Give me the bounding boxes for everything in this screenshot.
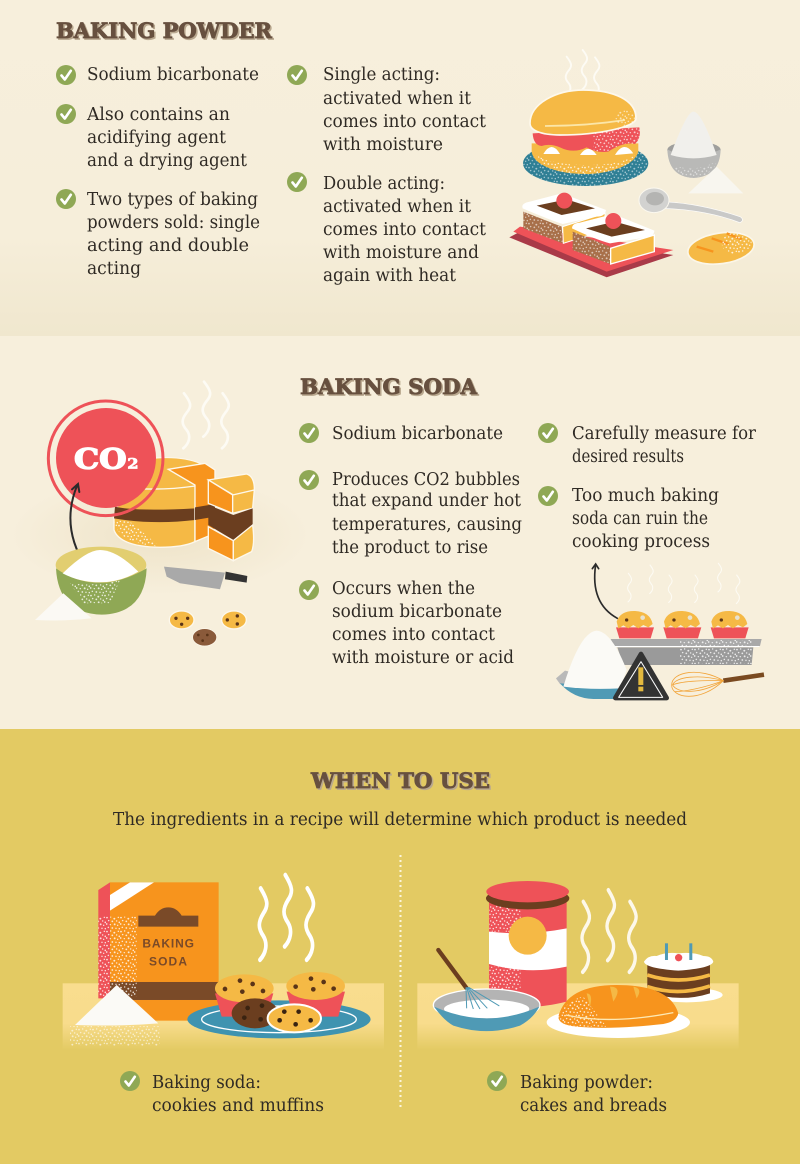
baking soda box: BAKING xyxy=(142,937,194,951)
check icons column two xyxy=(538,423,558,506)
heading: when to use: WHEN TO USE xyxy=(311,770,492,794)
muffins xyxy=(215,972,345,1017)
panel: when to use xyxy=(0,729,800,1164)
text: powder facts column two: activated when it xyxy=(323,89,471,109)
illustration: muffins, pan, warning, whisk xyxy=(556,563,764,699)
text: powder facts column one: powders sold: single xyxy=(87,213,260,233)
cake slice xyxy=(208,474,254,561)
heading: baking soda: BAKING SODA xyxy=(300,374,478,399)
check icons column one xyxy=(299,423,319,600)
text: soda facts column one: temperatures, causing xyxy=(332,515,522,535)
green bowl with powder xyxy=(35,547,147,621)
steam xyxy=(582,890,636,972)
check icon: soda use xyxy=(120,1071,140,1091)
text: soda facts column two xyxy=(572,424,757,552)
text: powder facts column one: acting and double xyxy=(87,236,249,256)
text: baking powder use: cakes and breads xyxy=(520,1096,667,1116)
CO2 badge: 2 xyxy=(127,457,139,473)
text: soda facts column one: sodium bicarbonate xyxy=(332,602,502,622)
heading: when to use: WHEN TO USE xyxy=(310,768,490,793)
text: soda facts column one: with moisture or acid xyxy=(332,648,514,668)
baking powder can xyxy=(486,881,569,1007)
heading: baking powder: BAKING POWDER xyxy=(58,20,274,44)
round cake with cut xyxy=(114,458,215,547)
check icons column one xyxy=(56,65,76,209)
CO2 badge xyxy=(48,401,163,516)
illustration: baking soda box, cookies, muffins xyxy=(63,875,384,1050)
text: powder facts column two: comes into contact xyxy=(323,220,486,240)
knife xyxy=(164,567,247,589)
text: powder facts column one: Also contains an xyxy=(86,105,230,125)
subtitle: The ingredients in a recipe will determine which product is needed xyxy=(113,810,687,830)
plate xyxy=(187,1000,371,1038)
spoon xyxy=(639,188,742,223)
text: soda facts column two: cooking process xyxy=(572,532,710,552)
panel: baking powder xyxy=(0,0,800,336)
steam xyxy=(259,875,313,960)
text: powder facts column one: and a drying agent xyxy=(87,151,247,171)
bread xyxy=(686,228,756,268)
text: baking soda use: cookies and muffins xyxy=(152,1096,324,1116)
table xyxy=(63,983,384,1050)
birthday cake xyxy=(644,943,723,1002)
steam xyxy=(628,563,740,604)
text: baking soda use: Baking soda: xyxy=(152,1073,261,1093)
check icon: powder use xyxy=(487,1071,507,1091)
text: soda facts column one: the product to rise xyxy=(332,538,488,558)
text: powder facts column two: activated when it xyxy=(323,197,471,217)
text: soda facts column one: Sodium bicarbonate xyxy=(332,424,503,444)
divider xyxy=(400,855,402,1110)
text: soda facts column one: Produces CO2 bubbles xyxy=(332,470,520,490)
arrow: bowl to CO2 xyxy=(70,484,86,567)
illustration: CO2, cake, bowl, knife, cookies xyxy=(35,382,254,646)
text: powder facts column two: Single acting: xyxy=(323,65,440,85)
text: powder facts column one: Two types of baking xyxy=(87,190,258,210)
illustration: cakes, powder bowl, spoon, bread xyxy=(509,50,756,277)
baking soda box xyxy=(98,882,219,1021)
text: powder facts column two: comes into contact xyxy=(323,112,486,132)
check icons column two xyxy=(287,65,307,192)
text: soda facts column one: that expand under hot xyxy=(332,491,521,511)
text: baking powder use: Baking powder: xyxy=(520,1073,653,1093)
red mat xyxy=(509,227,673,277)
soft shadow behind cake xyxy=(10,475,310,595)
warning sign xyxy=(615,654,667,698)
text: powder facts column two xyxy=(323,65,486,286)
illustration: baking powder can, bread, cake xyxy=(417,881,739,1050)
steam xyxy=(183,382,229,448)
text: baking powder use xyxy=(520,1073,667,1116)
whisk xyxy=(672,672,764,696)
arrow upward xyxy=(592,564,617,618)
mixing bowl and whisk xyxy=(433,950,540,1031)
powder pile xyxy=(70,985,160,1046)
muffins xyxy=(616,611,749,638)
powder in teal bowl xyxy=(556,631,627,699)
cookies xyxy=(169,611,246,646)
heading: baking powder: BAKING POWDER xyxy=(56,18,273,43)
powder bowl xyxy=(667,112,743,193)
text: soda facts column one: Occurs when the xyxy=(332,579,475,599)
cookies xyxy=(232,998,321,1032)
cake slices xyxy=(522,193,654,264)
layered cake on plate xyxy=(523,90,648,186)
text: powder facts column one: acidifying agent xyxy=(87,128,226,148)
baking soda box: SODA xyxy=(149,954,187,968)
text: powder facts column two: with moisture and xyxy=(323,243,479,263)
CO2 badge: CO xyxy=(74,442,127,475)
text: soda facts column two: Too much baking xyxy=(572,486,719,506)
text: soda facts column one: comes into contact xyxy=(332,625,495,645)
text: powder facts column two: Double acting: xyxy=(323,174,445,194)
table xyxy=(417,983,739,1050)
baking pan xyxy=(611,639,762,665)
bread on plate xyxy=(547,985,690,1038)
text: baking soda use xyxy=(152,1073,324,1116)
text: powder facts column one xyxy=(86,65,260,279)
steam xyxy=(566,50,599,97)
text: powder facts column one: Sodium bicarbonate xyxy=(87,65,259,85)
text: soda facts column two: desired results xyxy=(572,447,684,467)
text: soda facts column two: Carefully measure for xyxy=(572,424,757,444)
panel: baking soda xyxy=(0,336,800,730)
text: powder facts column two: again with heat xyxy=(323,266,456,286)
text: soda facts column one xyxy=(332,424,522,668)
heading: baking soda: BAKING SODA xyxy=(302,376,479,400)
text: soda facts column two: soda can ruin the xyxy=(572,509,708,529)
text: powder facts column two: with moisture xyxy=(323,135,443,155)
text: powder facts column one: acting xyxy=(87,259,141,279)
